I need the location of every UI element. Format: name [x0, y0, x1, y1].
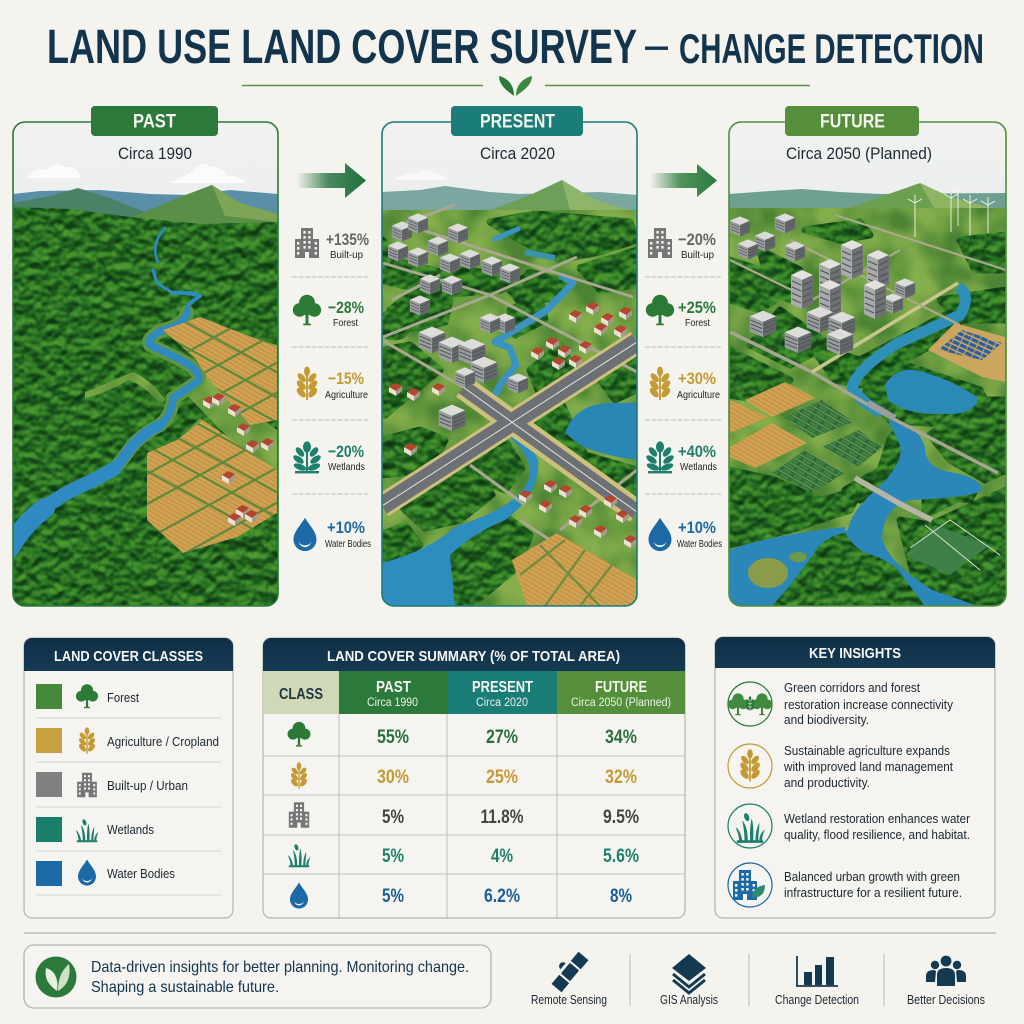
- table values: 9.5%: [603, 807, 639, 828]
- future fields: [730, 323, 1005, 575]
- future island and reeds: [748, 533, 925, 606]
- insights heading: [715, 637, 995, 668]
- insights heading: KEY INSIGHTS: [809, 645, 901, 662]
- footer message box: [24, 945, 491, 1008]
- column header: present: Circa 2020: [476, 697, 528, 709]
- column header: present: PRESENT: [472, 679, 533, 696]
- legend: agriculture: Agriculture / Cropland: [107, 734, 219, 749]
- insight: sustainable agriculture: and productivity.: [784, 775, 870, 790]
- table values: 8%: [610, 886, 632, 907]
- footer text: Data-driven insights for better planning. Monitoring change.: [91, 959, 469, 976]
- stat: built-up: +135%: [326, 230, 369, 249]
- past forest: [13, 207, 278, 606]
- present label pill: [451, 106, 583, 136]
- legend: forest: Forest: [107, 690, 139, 705]
- present crop fields: [512, 533, 637, 606]
- legend: water bodies: Water Bodies: [107, 866, 175, 881]
- stat: agriculture: Agriculture: [677, 389, 720, 401]
- icon: remote sensing: Remote Sensing: [531, 993, 607, 1007]
- future border: [729, 122, 1006, 606]
- past farmsteads: [203, 393, 274, 526]
- icon: GIS analysis: [660, 954, 718, 1007]
- legend heading: LAND COVER CLASSES: [54, 648, 203, 665]
- stat: agriculture: Agriculture: [325, 389, 368, 401]
- stat: forest: +25%: [678, 298, 716, 317]
- panel: key insights: [715, 637, 995, 918]
- insight: wetland restoration: quality, flood resilience, and habitat.: [784, 827, 970, 842]
- future wind turbines: [908, 184, 995, 239]
- panel: land cover summary table: [263, 638, 685, 918]
- past border: [13, 122, 278, 606]
- table values: 25%: [486, 767, 518, 788]
- stat: wetlands: −20%: [328, 442, 364, 461]
- insight: sustainable agriculture: [728, 743, 953, 790]
- present minor roads: [382, 204, 636, 540]
- insight: green corridors: Green corridors and forest: [784, 680, 920, 695]
- present ground: [382, 210, 637, 606]
- column header: future: FUTURE: [595, 679, 647, 696]
- column header: future: Circa 2050 (Planned): [571, 697, 671, 709]
- stat: agriculture: [648, 367, 720, 401]
- legend: agriculture: [36, 727, 219, 754]
- arrow: present to future: [650, 164, 717, 197]
- stat: water bodies: +10%: [678, 518, 716, 537]
- column header: past: PAST: [376, 679, 411, 696]
- table values: 30%: [377, 767, 409, 788]
- future roads and bridges: [730, 215, 1006, 520]
- present label pill: PRESENT: [480, 112, 555, 132]
- past sky and mountains: [14, 164, 278, 224]
- column header: past: Circa 1990: [367, 697, 418, 709]
- table heading: LAND COVER SUMMARY (% OF TOTAL AREA): [327, 648, 620, 665]
- panel: future map: [729, 122, 1006, 606]
- column header: present: [447, 671, 557, 714]
- icon: better decisions: [907, 956, 985, 1007]
- legend heading: [24, 638, 233, 671]
- future sky and mountains: [730, 183, 1006, 208]
- stat: forest: −28%: [328, 298, 364, 317]
- stat: wetlands: Wetlands: [680, 461, 717, 473]
- insight: balanced urban growth: [728, 863, 962, 907]
- present date: Circa 2020: [480, 145, 555, 163]
- stat: water bodies: Water Bodies: [325, 538, 371, 550]
- stat: wetlands: Wetlands: [328, 461, 365, 473]
- table values: 5%: [382, 846, 404, 867]
- past river: [8, 228, 200, 550]
- icon: better decisions: Better Decisions: [907, 993, 985, 1007]
- column header: class: CLASS: [279, 686, 323, 703]
- stat: forest: [293, 295, 364, 329]
- past lawn strips: [85, 318, 277, 478]
- insight: balanced urban growth: infrastructure for a resilient future.: [784, 885, 962, 900]
- legend: water bodies: [36, 860, 175, 886]
- legend: forest: [36, 684, 139, 709]
- stat: agriculture: −15%: [328, 369, 364, 388]
- insight: sustainable agriculture: with improved land management: [783, 759, 953, 774]
- future tree clusters: [729, 222, 1006, 605]
- present water: [382, 228, 637, 606]
- future label pill: [785, 106, 919, 136]
- column header: future: [557, 671, 685, 714]
- table values: 6.2%: [484, 886, 520, 907]
- insight: wetland restoration: [728, 804, 971, 848]
- future ground: [729, 208, 1006, 606]
- panel: land cover classes legend: [24, 638, 233, 918]
- icon: GIS analysis: GIS Analysis: [660, 993, 718, 1007]
- title: LAND USE LAND COVER SURVEY: [47, 21, 637, 74]
- column header: past: [339, 671, 447, 714]
- icon: remote sensing: [531, 948, 607, 1007]
- change stats: present to future: [645, 228, 722, 551]
- stat: agriculture: +30%: [678, 369, 716, 388]
- stat: built-up: Built-up: [330, 249, 363, 261]
- icon: leaf badge: [36, 956, 76, 998]
- table icons: [288, 722, 310, 909]
- stat: water bodies: +10%: [327, 518, 365, 537]
- present tree clusters: [380, 214, 637, 606]
- table heading: [263, 638, 685, 671]
- panel: past map: [12, 121, 279, 607]
- future water: [730, 287, 982, 606]
- stat: forest: [646, 295, 716, 329]
- past label pill: [91, 106, 218, 136]
- stat: water bodies: [648, 518, 722, 551]
- stat: water bodies: Water Bodies: [677, 538, 722, 550]
- table values: 32%: [605, 767, 637, 788]
- stat: forest: Forest: [333, 317, 358, 329]
- table values: 5%: [382, 886, 404, 907]
- insight: balanced urban growth: Balanced urban growth with green: [784, 869, 960, 884]
- footer text: Shaping a sustainable future.: [91, 979, 279, 996]
- arrow: past to present: [297, 163, 366, 198]
- insight: sustainable agriculture: Sustainable agriculture expands: [784, 743, 950, 758]
- icon: change detection: Change Detection: [775, 993, 859, 1007]
- title divider with leaf: [242, 76, 810, 96]
- table values: 5.6%: [603, 846, 639, 867]
- stat: wetlands: +40%: [678, 442, 716, 461]
- legend: wetlands: Wetlands: [107, 822, 154, 837]
- insight: green corridors: restoration increase connectivity: [784, 697, 953, 712]
- stat: wetlands: [645, 441, 717, 473]
- stat: built-up: [295, 228, 369, 261]
- legend: wetlands: [36, 817, 154, 842]
- insight: green corridors: [728, 680, 953, 727]
- stat: wetlands: [292, 441, 365, 473]
- future buildings: [730, 213, 915, 355]
- panel: present map: [380, 122, 637, 606]
- table values: 55%: [377, 727, 409, 748]
- stat: forest: Forest: [685, 317, 710, 329]
- past label pill: PAST: [133, 112, 176, 132]
- footer text: [91, 959, 469, 996]
- legend: built-up: Built-up / Urban: [107, 778, 188, 793]
- table values: 27%: [486, 727, 518, 748]
- column header: class: [263, 671, 339, 714]
- present sky and mountains: [382, 170, 636, 210]
- icon: change detection: [775, 956, 859, 1007]
- past crop fields: [147, 317, 277, 553]
- table values: 34%: [605, 727, 637, 748]
- insight: green corridors: and biodiversity.: [784, 712, 869, 727]
- stat: water bodies: [294, 518, 371, 551]
- stat: agriculture: [295, 367, 368, 401]
- stat: built-up: [648, 228, 716, 261]
- stat: built-up: Built-up: [681, 249, 714, 261]
- stat: built-up: −20%: [678, 230, 716, 249]
- present highways: [382, 342, 637, 512]
- future label pill: FUTURE: [820, 112, 885, 132]
- table values: 4%: [491, 846, 513, 867]
- table values: 11.8%: [480, 807, 524, 828]
- legend: built-up: [36, 772, 188, 797]
- change stats: past to present: [292, 228, 371, 551]
- table values: [377, 727, 639, 907]
- insight: wetland restoration: Wetland restoration enhances water: [784, 811, 971, 826]
- past date: Circa 1990: [118, 145, 192, 163]
- present border: [382, 122, 637, 606]
- present buildings: [388, 213, 637, 548]
- table values: 5%: [382, 807, 404, 828]
- future date: Circa 2050 (Planned): [786, 145, 932, 163]
